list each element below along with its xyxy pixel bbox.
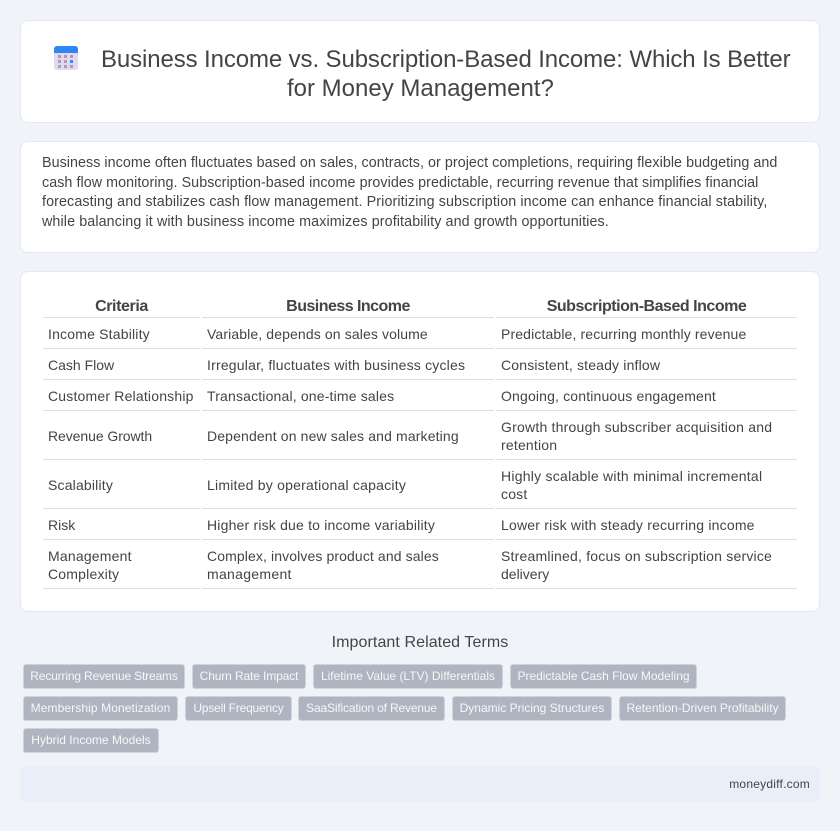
tags: related terms: Hybrid Income Models	[31, 733, 151, 747]
icon: calendar	[54, 46, 78, 70]
footer text: source: moneydiff.com	[729, 777, 810, 791]
tags: related terms: Lifetime Value (LTV) Differentials	[321, 669, 495, 683]
table row: management complexity: management	[207, 566, 292, 582]
table row: risk: Risk	[48, 517, 75, 533]
title: for Money Management?	[287, 75, 554, 102]
tags: related terms: Membership Monetization	[31, 701, 170, 715]
title	[101, 46, 790, 102]
text block: intro: cash flow monitoring. Subscription-based income provides predictable, recurring revenue that simplifies financial	[42, 175, 758, 191]
table row: customer relationship: Ongoing, continuous engagement	[501, 388, 716, 404]
table row: risk: Higher risk due to income variability	[207, 517, 435, 533]
table row: cash flow: Cash Flow	[48, 357, 114, 373]
text block: intro: Business income often fluctuates based on sales, contracts, or project completions, requiring flexible budgeting and	[42, 155, 777, 171]
table row: scalability	[48, 468, 762, 502]
table row: management complexity	[48, 548, 772, 582]
tags: related terms: Dynamic Pricing Structures	[460, 701, 604, 715]
table row: revenue growth: Revenue Growth	[48, 428, 152, 444]
table: header	[95, 298, 746, 315]
tags: related terms: SaaSification of Revenue	[306, 701, 437, 715]
panel: title card	[20, 20, 820, 123]
text block: intro: while balancing it with business income maximizes profitability and growth opportunities.	[42, 214, 609, 230]
tags: related terms: Predictable Cash Flow Modeling	[517, 669, 690, 683]
table row: cash flow: Consistent, steady inflow	[501, 357, 660, 373]
table: header: Business Income	[286, 298, 410, 315]
table row: customer relationship: Transactional, one-time sales	[207, 388, 394, 404]
text block: intro	[42, 155, 777, 230]
table row: revenue growth: Dependent on new sales and marketing	[207, 428, 459, 444]
tags: related terms: Retention-Driven Profitability	[626, 701, 779, 715]
table row: customer relationship: Customer Relationship	[48, 388, 194, 404]
tags: related terms	[23, 664, 786, 753]
table row: scalability: Limited by operational capacity	[207, 477, 406, 493]
table: header: Subscription-Based Income	[547, 298, 746, 315]
table row: management complexity: delivery	[501, 566, 549, 582]
table row: risk	[48, 517, 755, 533]
panel: comparison table	[20, 271, 820, 612]
table row: revenue growth	[48, 419, 772, 453]
table row: income stability: Predictable, recurring monthly revenue	[501, 326, 746, 342]
table: header: Criteria	[95, 298, 148, 315]
title: Business Income vs. Subscription-Based Income: Which Is Better	[101, 46, 790, 73]
table row: income stability	[48, 326, 746, 342]
table row: revenue growth: retention	[501, 437, 557, 453]
table row: management complexity: Complex, involves product and sales	[207, 548, 439, 564]
table row: cash flow: Irregular, fluctuates with business cycles	[207, 357, 465, 373]
tags: related terms: Upsell Frequency	[193, 701, 284, 715]
table row: management complexity: Streamlined, focus on subscription service	[501, 548, 772, 564]
table row: scalability: Scalability	[48, 477, 113, 493]
table row: scalability: cost	[501, 486, 527, 502]
panel: intro paragraph	[20, 141, 820, 253]
table row: revenue growth: Growth through subscriber acquisition and	[501, 419, 772, 435]
footer bar	[20, 767, 820, 801]
heading: important related terms: Important Related Terms	[332, 634, 508, 651]
text block: intro: forecasting and stabilizes cash flow management. Prioritizing subscription income can enhance financial stability,	[42, 194, 767, 210]
table row: income stability: Variable, depends on sales volume	[207, 326, 428, 342]
table row: management complexity: Complexity	[48, 566, 119, 582]
table row: scalability: Highly scalable with minimal incremental	[501, 468, 762, 484]
table row: management complexity: Management	[48, 548, 132, 564]
table row: risk: Lower risk with steady recurring income	[501, 517, 755, 533]
table row: customer relationship	[48, 388, 716, 404]
tags: related terms: Recurring Revenue Streams	[30, 669, 178, 683]
table row: cash flow	[48, 357, 660, 373]
tags: related terms: Churn Rate Impact	[200, 669, 298, 683]
table row: income stability: Income Stability	[48, 326, 150, 342]
